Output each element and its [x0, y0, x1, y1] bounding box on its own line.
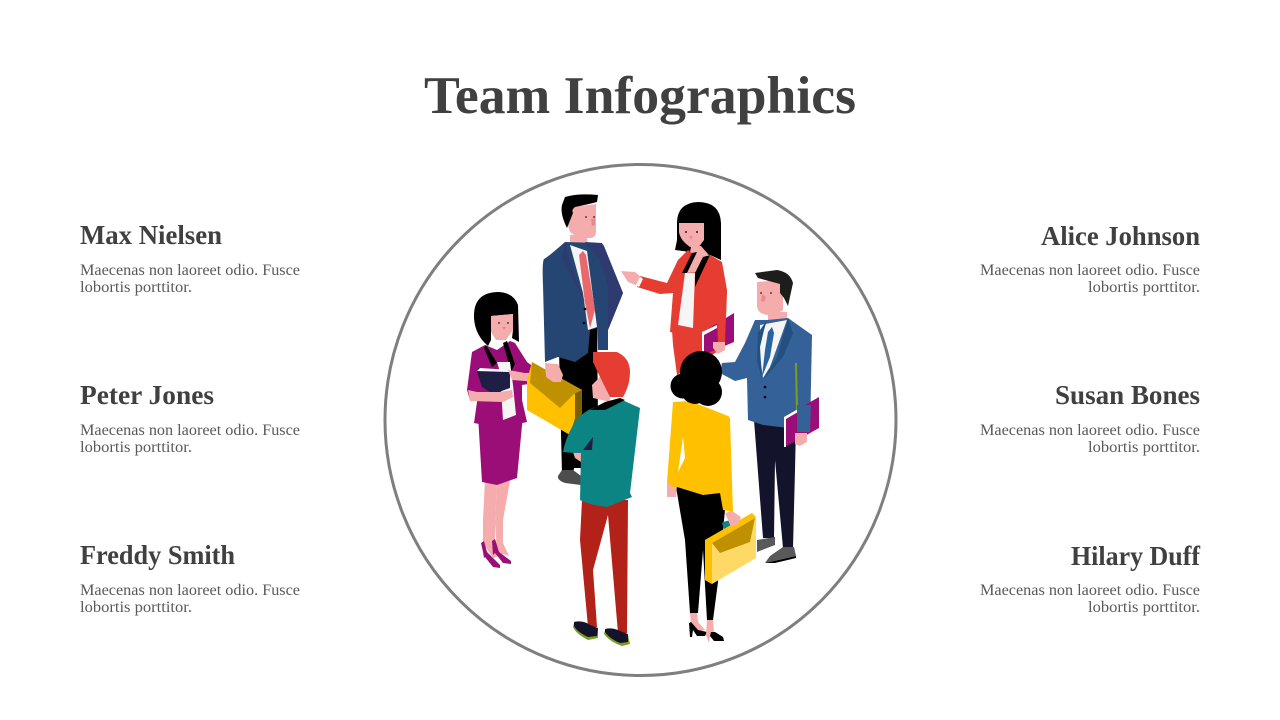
member: Max Nielsen [80, 220, 300, 296]
member: Peter Jones: Maecenas non laoreet odio. Fusce [80, 422, 300, 439]
figure: man in blue suit [720, 270, 819, 563]
member: Freddy Smith: Maecenas non laoreet odio. Fusce [80, 582, 300, 599]
member: Freddy Smith: lobortis porttitor. [80, 599, 192, 616]
figure: man in navy suit [543, 194, 623, 485]
figure: woman in yellow top [667, 351, 756, 643]
member: Peter Jones: lobortis porttitor. [80, 439, 192, 456]
member: Susan Bones: lobortis porttitor. [1088, 439, 1200, 456]
member: Hilary Duff: Hilary Duff [1071, 541, 1201, 571]
member: Alice Johnson: Alice Johnson [1041, 221, 1200, 251]
member: Peter Jones [80, 380, 300, 456]
member: Hilary Duff [980, 541, 1201, 616]
member: Freddy Smith [80, 540, 300, 616]
member: Susan Bones [980, 380, 1200, 456]
member: Max Nielsen: Max Nielsen [80, 220, 222, 250]
figure: man in teal sweater [563, 352, 640, 646]
member: Hilary Duff: Maecenas non laoreet odio. Fusce [980, 582, 1200, 599]
member: Peter Jones: Peter Jones [80, 380, 214, 410]
member: Susan Bones: Maecenas non laoreet odio. Fusce [980, 422, 1200, 439]
member: Alice Johnson [980, 221, 1200, 296]
circle outline [385, 164, 896, 676]
member: Hilary Duff: lobortis porttitor. [1088, 599, 1200, 616]
member: Alice Johnson: Maecenas non laoreet odio. Fusce [980, 262, 1200, 279]
title: Team Infographics [424, 67, 856, 125]
member: Alice Johnson: lobortis porttitor. [1088, 279, 1200, 296]
figure: woman in purple suit [467, 292, 543, 568]
member: Susan Bones: Susan Bones [1055, 380, 1200, 410]
member: Freddy Smith: Freddy Smith [80, 540, 235, 570]
member: Max Nielsen: Maecenas non laoreet odio. Fusce [80, 262, 300, 279]
member: Max Nielsen: lobortis porttitor. [80, 279, 192, 296]
briefcase: yellow, held by navy man [527, 362, 582, 435]
figure: woman in red suit [621, 202, 734, 375]
